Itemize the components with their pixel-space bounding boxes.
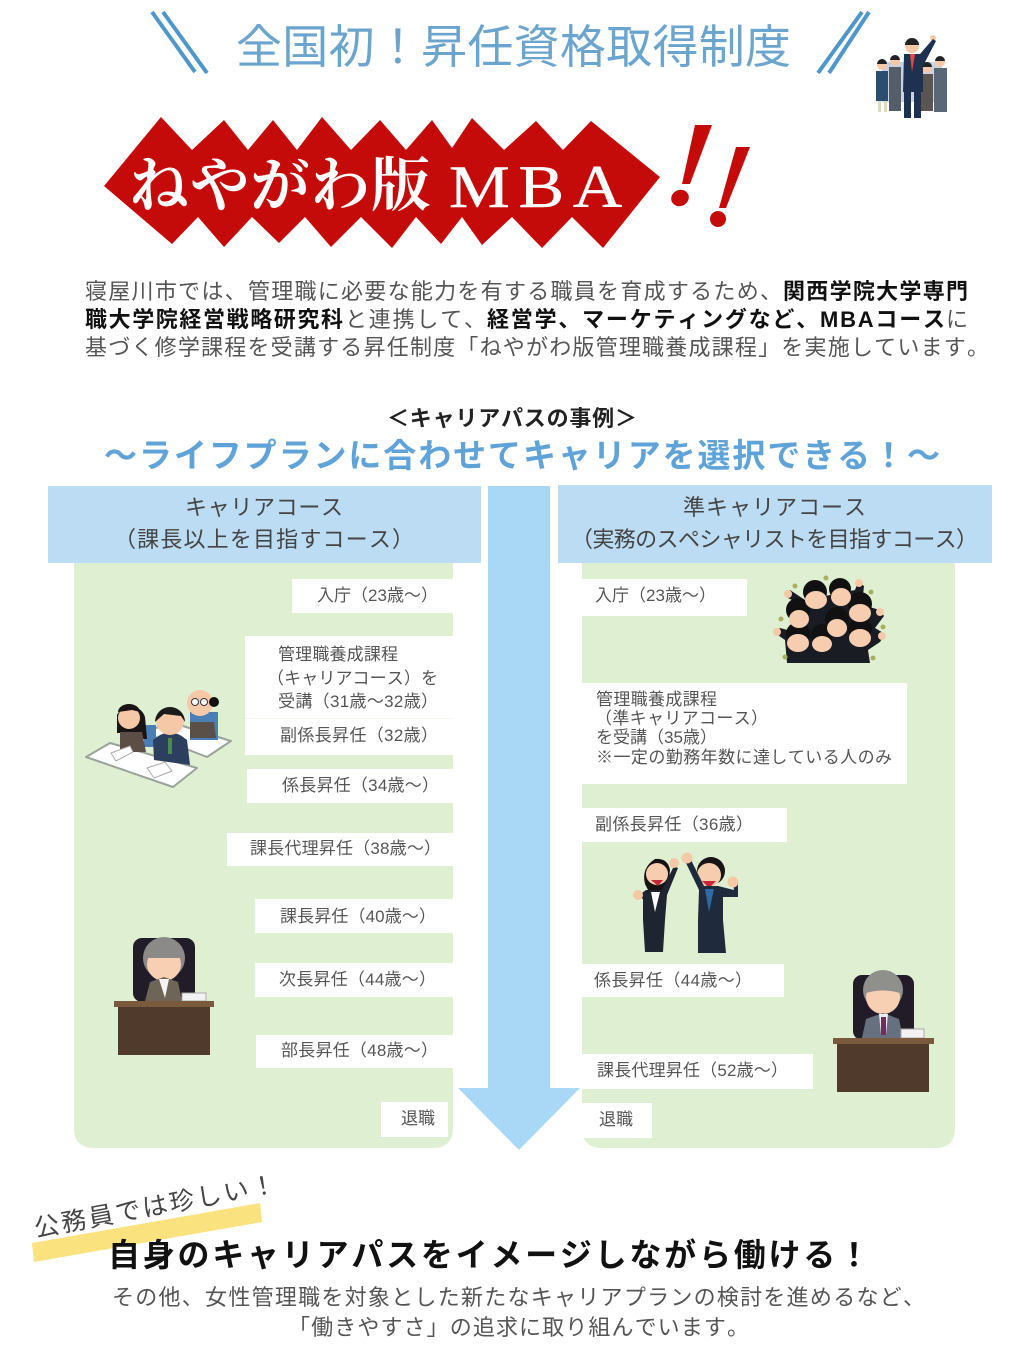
step: deputy director: 次長昇任（44歳～） <box>279 970 436 989</box>
step: deputy section head: 課長代理昇任（52歳～） <box>597 1061 788 1080</box>
step: section head: 課長昇任（40歳～） <box>280 907 436 926</box>
icon: students at desks <box>86 690 231 787</box>
banner: ねやがわ版 MBA <box>104 117 660 248</box>
header: career course <box>48 486 481 563</box>
closing text: その他、女性管理職を対象とした新たなキャリアプランの検討を進めるなど、 <box>112 1285 925 1310</box>
icon: exclamation marks <box>668 125 750 227</box>
banner: ねやがわ版 MBA: ねやがわ版 <box>130 153 430 219</box>
intro text: に <box>946 307 968 332</box>
step: management training and deputy chief: 副係長昇任（32歳） <box>280 726 438 745</box>
step: management training and deputy chief: （キャリアコース）を <box>267 669 438 688</box>
panel: career course <box>48 486 481 1148</box>
step: section head <box>255 899 453 933</box>
step: deputy chief: 副係長昇任（36歳） <box>595 815 753 834</box>
arrow: timeline <box>458 486 580 1150</box>
step: joining <box>582 579 747 616</box>
step: management training and deputy chief: 管理職養成課程 <box>278 645 398 664</box>
step: management training and deputy chief <box>245 636 453 755</box>
step: management training: （準キャリアコース） <box>595 709 768 728</box>
step: chief: 係長昇任（44歳～） <box>594 971 752 990</box>
closing text: 「働きやすさ」の追求に取り組んでいます。 <box>288 1315 749 1340</box>
intro text <box>85 279 989 360</box>
intro text: と連携して、 <box>345 307 486 332</box>
step: retirement: 退職 <box>599 1110 633 1129</box>
intro text: 基づく修学課程を受講する昇任制度「ねやがわ版管理職養成課程」を実施しています。 <box>85 335 989 360</box>
closing text <box>112 1285 925 1340</box>
intro text: 職大学院経営戦略研究科 <box>85 307 343 332</box>
title <box>152 12 869 73</box>
step: chief <box>582 964 784 997</box>
intro text: 寝屋川市では、管理職に必要な能力を有する職員を育成するため、 <box>85 279 782 304</box>
header: career course: （課長以上を目指すコース） <box>114 527 414 552</box>
icon: cheering crowd <box>773 576 886 663</box>
intro text: 経営学、マーケティングなど、MBAコース <box>487 307 945 332</box>
step: deputy section head <box>582 1054 813 1089</box>
step: deputy section head: 課長代理昇任（38歳～） <box>250 839 441 858</box>
step: joining <box>292 579 453 613</box>
heading: imagine your career path: 自身のキャリアパスをイメージしながら働ける！ <box>108 1237 870 1273</box>
icon: woman executive at desk <box>114 937 214 1055</box>
icon: cheering pair <box>633 852 738 953</box>
step: deputy director <box>255 963 453 997</box>
step: joining: 入庁（23歳～） <box>595 586 716 605</box>
icon: male executive at desk <box>833 970 934 1092</box>
header: career course: キャリアコース <box>185 495 343 520</box>
intro text: 関西学院大学専門 <box>783 279 968 304</box>
banner: ねやがわ版 MBA: MBA <box>449 154 622 220</box>
step: management training <box>582 683 907 784</box>
step: management training: ※一定の勤務年数に達している人のみ <box>596 748 892 767</box>
header: semi-career course: 準キャリアコース <box>683 495 866 520</box>
callout: rare for civil servants: 公務員では珍しい！ <box>32 1171 278 1243</box>
icon: business group <box>876 35 947 118</box>
step: chief: 係長昇任（34歳～） <box>282 776 439 795</box>
step: retirement: 退職 <box>401 1109 435 1128</box>
step: management training: を受講（35歳） <box>596 728 717 747</box>
step: director: 部長昇任（48歳～） <box>281 1041 438 1060</box>
step: management training and deputy chief: 受講（31歳～32歳） <box>278 692 438 711</box>
header: semi-career course: （実務のスペシャリストを目指すコース） <box>571 527 978 552</box>
step: deputy chief <box>582 808 787 842</box>
panel: semi-career course <box>558 485 992 1148</box>
step: retirement <box>381 1102 448 1137</box>
step: director <box>256 1035 453 1068</box>
heading: career path example: ＜キャリアパスの事例＞ <box>387 406 637 431</box>
heading: choose career: ～ライフプランに合わせてキャリアを選択できる！～ <box>104 437 940 474</box>
step: retirement <box>582 1103 652 1138</box>
step: deputy section head <box>227 833 453 866</box>
step: management training: 管理職養成課程 <box>596 690 717 709</box>
step: chief <box>247 769 453 803</box>
header: semi-career course <box>558 485 992 563</box>
title: 全国初！昇任資格取得制度 <box>236 21 791 73</box>
step: joining: 入庁（23歳～） <box>317 586 438 605</box>
